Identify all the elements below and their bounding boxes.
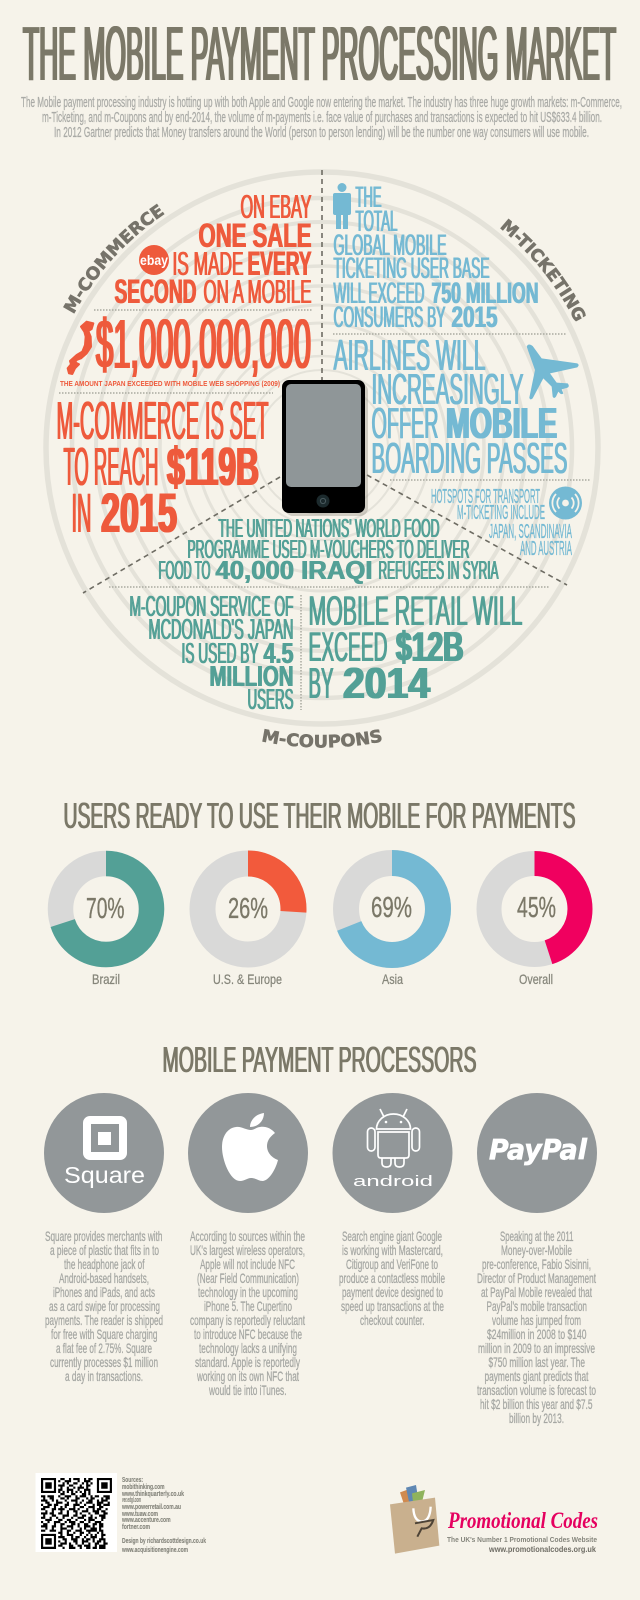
- text: Square description: a piece of plastic that fits in to: [50, 1242, 159, 1258]
- brand text: Promotional Codes: www.promotionalcodes.org.uk: [488, 1545, 596, 1554]
- stat: 750 million consumers: THE: [355, 181, 381, 214]
- stat: one sale every second on eBay: ON A MOBILE: [203, 273, 311, 310]
- curved label: M-Commerce: M-COMMERCE: [63, 204, 164, 314]
- text: $1,000,000,000: [96, 305, 311, 383]
- text: Square description: for free with Square charging: [51, 1326, 158, 1342]
- sources list: www.tuaw.com: [121, 1511, 158, 1518]
- sources list: www.thinkquarterly.co.uk: [121, 1491, 184, 1498]
- text: Android description: is working with Mastercard,: [342, 1242, 443, 1258]
- donut chart: Overall 45%: 45%: [517, 892, 556, 924]
- text: PayPal description: [477, 1228, 596, 1426]
- panel: m-coupons facts: M-COUPON SERVICE OF: [129, 591, 293, 623]
- text: Square description: the headphone jack of: [64, 1256, 145, 1272]
- donut chart: U.S. & Europe 26%: U.S. & Europe: [213, 971, 282, 987]
- text: Square description: Square provides merchants with: [45, 1228, 162, 1244]
- stat: 750 million consumers: [333, 181, 538, 334]
- logo: Android: android: [353, 1173, 433, 1190]
- donut chart: Overall 45%: Overall: [519, 971, 553, 987]
- icon: wireless hotspot: [549, 486, 582, 520]
- sources list: fortner.com: [122, 1524, 150, 1531]
- logo: Square: Square: [64, 1162, 145, 1188]
- logo: Apple: [188, 1093, 308, 1213]
- stat: mobile retail $12B: 2014: [343, 659, 430, 708]
- text: Square description: [45, 1228, 163, 1384]
- text: Apple description: (Near Field Communication): [197, 1270, 299, 1286]
- stat: mobile boarding passes: AIRLINES WILL: [333, 331, 485, 380]
- stat: mobile retail $12B: [308, 587, 522, 708]
- caption: Japan mobile web shopping: THE AMOUNT JAPAN EXCEEDED WITH MOBILE WEB SHOPPING (2009): [60, 379, 280, 388]
- icon: airplane: [527, 344, 579, 399]
- stat: m-commerce $119B: IN: [71, 481, 91, 544]
- text: Square description: a day in transactions.: [65, 1368, 143, 1384]
- donut chart: Brazil 70%: 70%: [86, 893, 124, 925]
- stat: McDonald's Japan coupons: MILLION: [209, 661, 293, 693]
- text: PayPal description: Money-over-Mobile: [501, 1242, 572, 1258]
- text: Apple description: would tie into iTunes.: [208, 1382, 286, 1398]
- sources list: Sources:: [122, 1477, 143, 1484]
- text: Apple description: working on its own NFC that: [196, 1368, 299, 1384]
- donut chart: Asia 69%: Asia: [382, 971, 403, 987]
- donut chart: Brazil 70%: [60, 864, 152, 987]
- QR code: [36, 1473, 117, 1552]
- logo: PayPal: PayPal: [489, 1133, 587, 1166]
- text: Square description: as a card swipe for processing: [49, 1298, 160, 1314]
- icon: eBay badge: ebay: [140, 252, 168, 268]
- sources list: Design by richardscottdesign.co.uk: [122, 1538, 206, 1545]
- text: Square description: payments. The reader is shipped: [45, 1312, 163, 1328]
- text: Apple description: UK's largest wireless operators,: [190, 1242, 305, 1258]
- stat: McDonald's Japan coupons: IS USED BY: [181, 638, 258, 670]
- stat: one sale every second on eBay: SECOND: [114, 273, 196, 311]
- sources list: www.powerretail.com.au: [121, 1504, 181, 1511]
- concentric ring backdrop: [46, 172, 598, 724]
- donut chart: U.S. & Europe 26%: [202, 864, 294, 987]
- stat: m-commerce $119B: $119B: [167, 437, 259, 497]
- icon: eBay badge: [139, 245, 169, 275]
- stat: McDonald's Japan coupons: 4.5: [263, 638, 293, 670]
- stat: mobile retail $12B: EXCEED: [308, 623, 387, 670]
- logo: Square: [44, 1093, 164, 1213]
- text: PayPal description: billion by 2013.: [509, 1410, 564, 1426]
- text: Apple description: [190, 1228, 305, 1398]
- stat: mobile retail $12B: $12B: [396, 623, 464, 670]
- logo: Promotional Codes bag: [390, 1485, 439, 1554]
- stat: mobile boarding passes: MOBILE: [446, 399, 557, 448]
- panel: m-coupons facts: USERS: [247, 684, 293, 716]
- brand text: Promotional Codes: The UK's Number 1 Promotional Codes Website: [447, 1535, 597, 1544]
- sources list: [121, 1477, 206, 1554]
- donut chart: U.S. & Europe 26%: 26%: [228, 893, 268, 925]
- donut chart: Asia 69%: 69%: [371, 892, 412, 924]
- stat: mobile retail $12B: BY: [308, 659, 333, 708]
- brand text: Promotional Codes: [447, 1508, 598, 1554]
- text: ON EBAY: [240, 188, 311, 225]
- phone illustration: [282, 380, 368, 516]
- stat: m-commerce $119B: [56, 391, 268, 544]
- stat: m-commerce $119B: 2015: [101, 481, 177, 544]
- text: Apple description: Apple will not include NFC: [200, 1256, 295, 1272]
- text: Square description: currently processes $1 million: [50, 1354, 158, 1370]
- text: Square description: Android-based handsets,: [59, 1270, 149, 1286]
- sources list: www.accenture.com: [121, 1517, 171, 1524]
- stat: 750 million consumers: GLOBAL MOBILE: [333, 229, 446, 262]
- text: Apple description: to introduce NFC because the: [194, 1326, 302, 1342]
- brand text: Promotional Codes: Promotional Codes: [447, 1508, 598, 1533]
- stat: one sale every second on eBay: EVERY: [247, 245, 311, 283]
- text: Android description: payment device designed to: [342, 1284, 443, 1300]
- stat: mobile boarding passes: OFFER: [371, 399, 438, 448]
- text: Android description: Search engine giant Google: [342, 1228, 442, 1244]
- logo: PayPal: [477, 1093, 597, 1213]
- text: Square description: iPhones and iPads, and acts: [53, 1284, 155, 1300]
- stat: 750 million consumers: CONSUMERS BY: [333, 301, 445, 334]
- text: Android description: produce a contactless mobile: [339, 1270, 445, 1286]
- stat: transport hotspots: [431, 486, 572, 560]
- panel: m-commerce facts: [56, 188, 312, 544]
- text: Android description: [339, 1228, 445, 1328]
- stat: 750 million consumers: WILL EXCEED: [333, 277, 424, 310]
- donut chart: Overall 45%: [489, 864, 580, 987]
- donut chart: Asia 69%: [346, 863, 438, 987]
- section dividers: [83, 170, 567, 593]
- stat: 750 million consumers: TOTAL: [355, 205, 397, 238]
- panel: m-coupons facts: MCDONALD'S JAPAN: [148, 614, 293, 646]
- donut chart: Brazil 70%: Brazil: [92, 971, 120, 987]
- sources list: www.acquisitionengine.com: [121, 1547, 188, 1554]
- panel: m-coupons facts: [109, 513, 549, 716]
- curved label: M-Ticketing: M-TICKETING: [500, 218, 586, 322]
- stat: one sale every second on eBay: ONE SALE: [198, 217, 311, 255]
- stat: World Food Programme vouchers: FOOD TO: [158, 555, 210, 585]
- stat: m-commerce $119B: TO REACH: [63, 437, 158, 497]
- icon: person: [333, 183, 351, 229]
- stat: World Food Programme vouchers: [158, 513, 498, 585]
- text: Android description: Citigroup and VeriFone to: [346, 1256, 438, 1272]
- panel: m-ticketing facts: [333, 181, 590, 560]
- text: Android description: checkout counter.: [360, 1312, 424, 1328]
- stat: 750 million consumers: 2015: [451, 301, 497, 334]
- stat: one sale every second on eBay: IS MADE: [172, 245, 243, 282]
- sources list: mobithinking.com: [122, 1484, 164, 1491]
- curved label: M-Coupons: M-COUPONS: [262, 728, 382, 748]
- sources list: ver.edgl.com: [122, 1497, 141, 1504]
- stat: one sale every second on eBay: [114, 188, 311, 311]
- text: Apple description: company is reportedly reluctant: [190, 1312, 305, 1328]
- text: Apple description: technology lacks a unifying: [199, 1340, 297, 1356]
- intro text: [21, 95, 622, 141]
- panel: m-coupons facts: REFUGEES IN SYRIA: [378, 555, 498, 585]
- text: Apple description: iPhone 5. The Cupertino: [204, 1298, 292, 1314]
- stat: World Food Programme vouchers: 40,000 IRAQI: [215, 555, 372, 585]
- text: Apple description: According to sources within the: [190, 1228, 305, 1244]
- stat: 750 million consumers: 750 MILLION: [431, 277, 538, 310]
- text: Square description: a flat fee of 2.75%. Square: [56, 1340, 152, 1356]
- text: PayPal description: Speaking at the 2011: [500, 1228, 574, 1244]
- stat: mobile boarding passes: [333, 331, 567, 483]
- text: Apple description: standard. Apple is reportedly: [195, 1354, 300, 1370]
- icon: map of Japan: [68, 322, 93, 374]
- logo: Android: [332, 1093, 452, 1213]
- text: M-COMMERCE IS SET: [56, 391, 268, 451]
- stat: McDonald's Japan coupons: [129, 591, 293, 716]
- text: Android description: speed up transactions at the: [341, 1298, 444, 1314]
- text: Apple description: technology in the upcoming: [198, 1284, 298, 1300]
